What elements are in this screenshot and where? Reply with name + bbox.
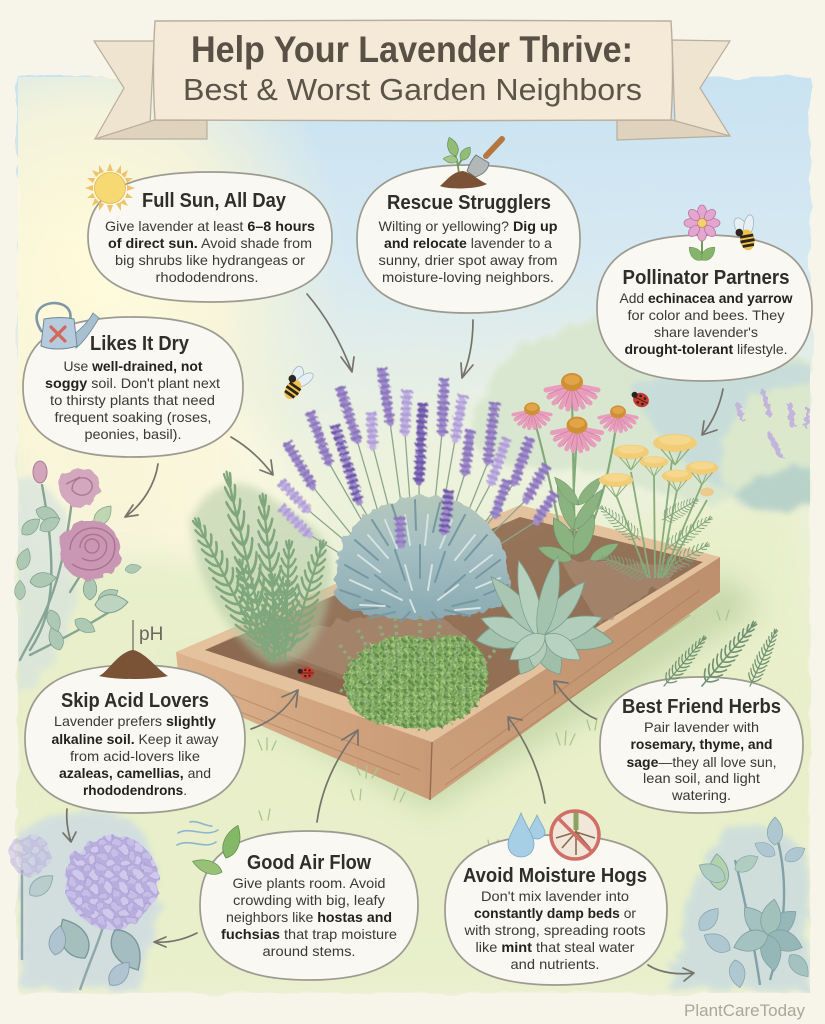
body text xyxy=(105,218,315,285)
bubble xyxy=(445,835,667,985)
bubble xyxy=(597,235,812,381)
body text: big shrubs like hydrangeas or xyxy=(115,252,305,268)
panel: skip acid lovers xyxy=(25,620,245,813)
panel: full sun xyxy=(85,163,332,302)
icon: herb sprigs xyxy=(659,617,782,691)
body text: azaleas, camellias, and xyxy=(59,765,211,781)
body text: with strong, spreading roots xyxy=(463,922,646,938)
body text: watering. xyxy=(671,787,731,803)
banner main panel xyxy=(154,20,672,121)
panel: likes it dry xyxy=(23,303,243,457)
bubble xyxy=(25,665,245,813)
arrows xyxy=(63,294,723,981)
title line two: Best & Worst Garden Neighbors xyxy=(183,72,642,107)
panel: avoid moisture hogs xyxy=(445,811,667,985)
banner right tail xyxy=(672,40,730,136)
heading: Skip Acid Lovers xyxy=(61,690,209,712)
panel: best friend herbs xyxy=(600,617,803,813)
body text: of direct sun. Avoid shade from xyxy=(108,235,312,251)
body text: Add echinacea and yarrow xyxy=(620,290,793,306)
body text: rhododendrons. xyxy=(156,269,258,285)
bubble xyxy=(357,165,580,313)
plant: roses xyxy=(14,461,142,660)
body text: and relocate lavender to a xyxy=(384,235,552,251)
body text: sage—they all love sun, xyxy=(626,754,776,770)
body text xyxy=(626,719,776,803)
icon: trowel and seedling xyxy=(440,136,502,188)
plant: hydrangeas xyxy=(9,834,159,990)
body text: frequent soaking (roses, xyxy=(54,409,212,425)
plant: echinacea xyxy=(513,373,637,566)
plant: rosemary xyxy=(185,470,335,666)
icon: sun xyxy=(85,163,135,213)
bubble xyxy=(23,317,243,457)
banner right fold xyxy=(617,120,730,140)
body text: constantly damp beds or xyxy=(474,905,636,921)
body text: and nutrients. xyxy=(510,956,600,972)
icon: watering can xyxy=(37,303,99,349)
plant: sage xyxy=(474,554,616,680)
plant: mint xyxy=(694,817,814,989)
body text: moisture-loving neighbors. xyxy=(382,269,554,285)
bubble xyxy=(600,677,803,813)
bubble xyxy=(88,172,332,302)
body text: fuchsias that trap moisture xyxy=(221,926,397,942)
plant: lavender foliage xyxy=(334,495,510,622)
body text: rhododendrons. xyxy=(83,782,187,798)
ladybug near echinacea xyxy=(628,389,651,410)
heading: Good Air Flow xyxy=(247,852,371,874)
icon: wind and leaves xyxy=(177,822,245,878)
body text: for color and bees. They xyxy=(628,307,784,323)
body text: soggy soil. Don't plant next xyxy=(45,375,220,391)
icon: pH soil mound: pH xyxy=(139,624,163,645)
body text xyxy=(378,218,558,285)
garden bed shadow on grass xyxy=(170,575,760,810)
bee over lavender xyxy=(276,361,317,405)
icon: pH soil mound xyxy=(99,620,168,679)
body text xyxy=(45,358,220,442)
body text: alkaline soil. Keep it away xyxy=(52,731,218,747)
icon: flower and bee xyxy=(684,205,761,264)
body text: peonies, basil). xyxy=(84,426,182,442)
grass tufts xyxy=(258,610,729,850)
body text xyxy=(620,290,793,357)
heading: Avoid Moisture Hogs xyxy=(463,865,647,887)
heading: Rescue Strugglers xyxy=(387,192,551,214)
body text: sunny, drier spot away from xyxy=(378,252,558,268)
panel: good air flow xyxy=(177,822,418,980)
faded lavender bush xyxy=(722,389,815,510)
body text: share lavender's xyxy=(654,324,758,340)
body text: Use well-drained, not xyxy=(64,358,203,374)
body text xyxy=(221,875,397,959)
body text: Give lavender at least 6–8 hours xyxy=(105,218,315,234)
icon: water drops xyxy=(508,813,545,857)
title banner xyxy=(94,20,730,140)
body text: Lavender prefers slightly xyxy=(54,713,216,729)
raised garden bed xyxy=(176,505,720,800)
distant hedge xyxy=(470,315,812,502)
title line one: Help Your Lavender Thrive: xyxy=(191,29,633,70)
body text xyxy=(463,888,646,972)
ladybug on soil xyxy=(298,667,314,679)
watermark: PlantCareToday xyxy=(684,1001,805,1020)
body text: drought-tolerant lifestyle. xyxy=(624,341,788,357)
body text: neighbors like hostas and xyxy=(226,909,392,925)
icon: no spreading roots xyxy=(551,811,599,859)
body text: Don't mix lavender into xyxy=(481,888,629,904)
heading: Best Friend Herbs xyxy=(622,696,781,718)
body text: from acid-lovers like xyxy=(70,748,200,764)
heading: Pollinator Partners xyxy=(622,267,790,289)
bubble xyxy=(200,831,418,980)
body text xyxy=(52,713,218,798)
heading: Full Sun, All Day xyxy=(142,190,287,212)
banner left fold xyxy=(95,120,207,139)
body text: to thirsty plants that need xyxy=(50,392,215,408)
body text: rosemary, thyme, and xyxy=(630,736,772,752)
panel: rescue strugglers xyxy=(357,136,580,313)
body text: crowding with big, leafy xyxy=(233,892,385,908)
banner left tail xyxy=(94,41,154,139)
plant: lavender spikes xyxy=(281,368,555,545)
heading: Likes It Dry xyxy=(90,333,190,355)
plant: yarrow xyxy=(596,434,718,583)
plant: lavender stems xyxy=(308,422,535,575)
body text: Wilting or yellowing? Dig up xyxy=(378,218,558,234)
panel: pollinator partners xyxy=(597,205,812,381)
body text: around stems. xyxy=(262,943,356,959)
body text: lean soil, and light xyxy=(643,770,760,786)
body text: Pair lavender with xyxy=(644,719,759,735)
body text: like mint that steal water xyxy=(476,939,635,955)
body text: Give plants room. Avoid xyxy=(232,875,386,891)
plant: thyme xyxy=(340,616,495,730)
